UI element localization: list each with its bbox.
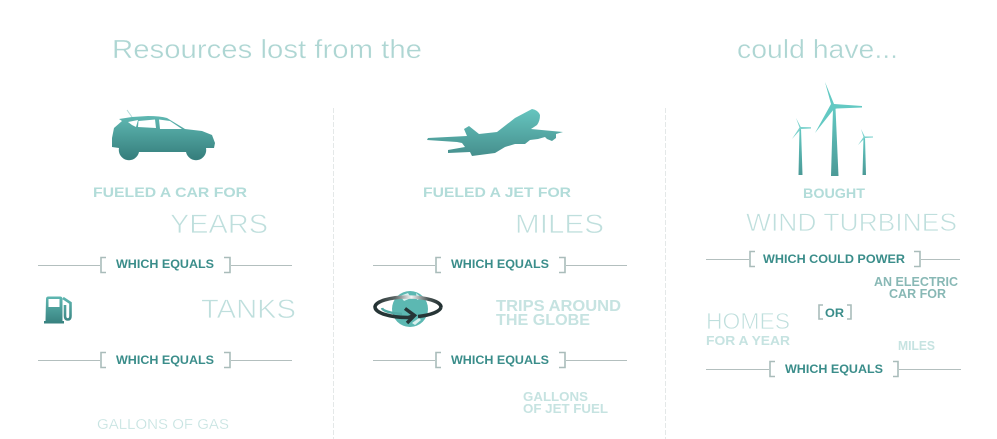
- column dividers: [334, 108, 666, 439]
- icon: globe with orbit arrow: [375, 291, 441, 327]
- value label: tanks: TANKS: [201, 294, 296, 324]
- value label: homes: HOMES: [706, 308, 790, 334]
- divider: which could power: [706, 252, 960, 266]
- value label: miles: MILES: [515, 209, 604, 239]
- title: resources lost: Resources lost from the: [112, 34, 422, 64]
- label: or: [819, 305, 851, 320]
- label: gallons of gas: GALLONS OF GAS: [97, 417, 229, 433]
- divider: which equals: WHICH EQUALS: [116, 259, 214, 271]
- label: an electric car for: AN ELECTRIC: [874, 275, 958, 289]
- value label: wind turbines: WIND TURBINES: [746, 209, 957, 237]
- label: trips around the globe: [496, 298, 621, 329]
- divider: which equals: WHICH EQUALS: [451, 259, 549, 271]
- heading: fueled a jet for: FUELED A JET FOR: [423, 184, 571, 200]
- divider: which equals: [38, 258, 292, 272]
- label: trips around the globe: TRIPS AROUND: [496, 298, 621, 315]
- label: an electric car for: [874, 275, 958, 301]
- divider: which equals 2: [373, 352, 627, 368]
- panel: jet column: [373, 109, 627, 416]
- icon: fuel pump: [44, 296, 70, 324]
- divider: which equals: [706, 362, 961, 376]
- divider: which equals 2: WHICH EQUALS: [451, 355, 549, 367]
- value label: years: YEARS: [170, 209, 268, 239]
- label: gallons of jet fuel: OF JET FUEL: [523, 401, 608, 416]
- divider: which could power: WHICH COULD POWER: [763, 254, 906, 266]
- label: miles: MILES: [898, 339, 935, 353]
- label: trips around the globe: THE GLOBE: [496, 312, 590, 329]
- heading: bought: BOUGHT: [803, 185, 865, 201]
- divider: which equals: [373, 258, 627, 272]
- divider: which equals 2: WHICH EQUALS: [116, 355, 214, 367]
- panel: wind turbine column: [706, 82, 961, 376]
- icon: wind turbines: [792, 82, 873, 176]
- icon: jet: [427, 109, 563, 156]
- title: could have: could have...: [737, 34, 898, 64]
- label: gallons of jet fuel: [523, 389, 608, 416]
- divider: which equals 2: [38, 352, 292, 368]
- label: gallons of jet fuel: GALLONS: [523, 389, 588, 404]
- icon: car: [112, 110, 215, 160]
- label: for a year: FOR A YEAR: [706, 333, 791, 348]
- heading: fueled a car for: FUELED A CAR FOR: [93, 184, 247, 200]
- label: an electric car for: CAR FOR: [889, 287, 946, 301]
- divider: which equals: WHICH EQUALS: [785, 364, 883, 376]
- label: or: OR: [825, 308, 845, 320]
- panel: car column: [38, 110, 296, 433]
